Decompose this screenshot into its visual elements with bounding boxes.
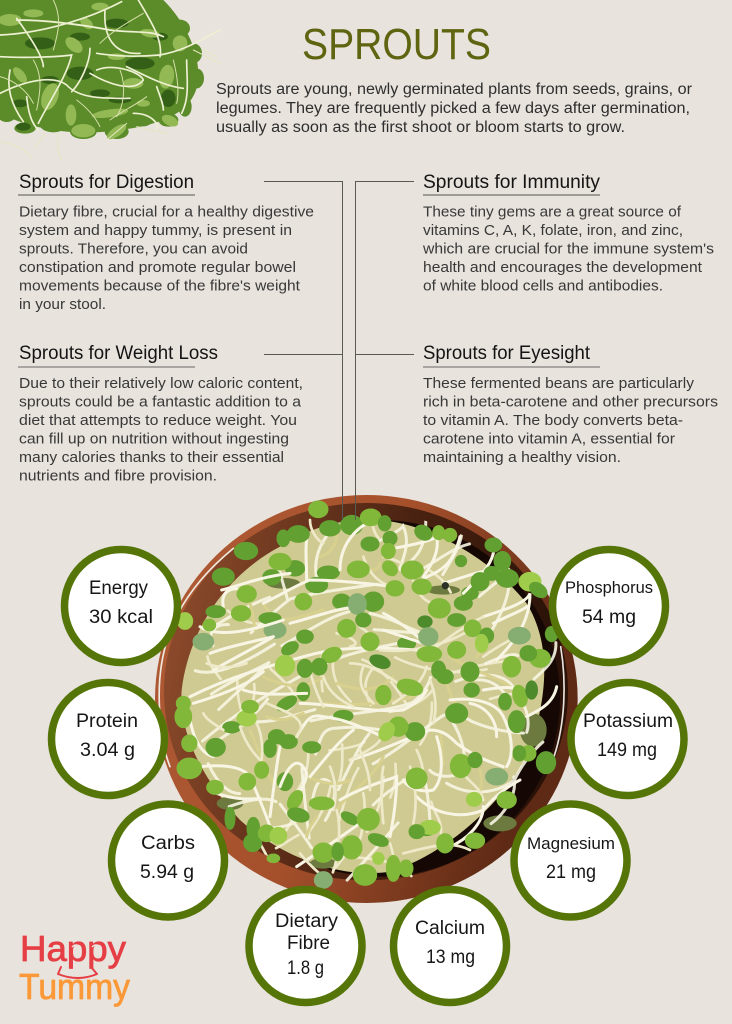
panel: immunity: of white blood cells and antibodies. [423, 278, 663, 294]
panel: eyesight: to vitamin A. The body converts beta- [423, 412, 683, 429]
nutrient: calcium [394, 890, 506, 1002]
panel: digestion: Sprouts for Digestion [19, 171, 194, 193]
panel: eyesight: maintaining a healthy vision. [423, 449, 621, 466]
nutrient: energy: Energy [89, 578, 148, 599]
intro text: Sprouts are young, newly germinated plants from seeds, grains, or [216, 81, 692, 98]
nutrient: phosphorus: Phosphorus [565, 579, 653, 597]
panel: weight loss: diet that attempts to reduce weight. You [19, 412, 297, 429]
nutrient: potassium: Potassium [583, 711, 673, 732]
nutrient: carbs: Carbs [141, 833, 195, 854]
panel: immunity: which are crucial for the immune system's [422, 240, 714, 258]
nutrient: carbs [112, 804, 224, 917]
panel: digestion: Dietary fibre, crucial for a healthy digestive [19, 204, 314, 220]
title: SPROUTS [302, 20, 491, 69]
nutrient: dietary fibre: Fibre [287, 933, 330, 954]
panel: weight loss: many calories thanks to their essential [19, 449, 284, 466]
panel: eyesight [423, 342, 718, 466]
nutrient: magnesium: 21 mg [546, 862, 596, 883]
nutrient: energy [64, 550, 178, 662]
intro text: usually as soon as the first shoot or bloom starts to grow. [216, 119, 625, 136]
nutrient: magnesium [514, 804, 627, 917]
nutrient: protein: Protein [76, 711, 138, 732]
panel: immunity: health and encourages the development [423, 259, 703, 276]
nutrient: potassium: 149 mg [597, 740, 657, 761]
panel: eyesight: These fermented beans are particularly [423, 375, 695, 392]
nutrient: energy: 30 kcal [89, 607, 153, 628]
panel: weight loss: nutrients and fibre provision. [19, 468, 217, 484]
panel: eyesight: Sprouts for Eyesight [423, 342, 591, 364]
nutrient: dietary fibre [249, 890, 362, 1002]
panel: digestion: in your stool. [19, 296, 106, 313]
nutrient: protein [52, 682, 164, 796]
panel: digestion: system and happy tummy, is present in [19, 222, 292, 239]
nutrient: magnesium: Magnesium [527, 835, 615, 853]
panel: immunity: vitamins C, A, K, folate, iron, and zinc, [423, 222, 683, 239]
nutrient: carbs: 5.94 g [140, 862, 194, 883]
panel: digestion: constipation and promote regular bowel [19, 259, 296, 276]
nutrient: calcium: Calcium [415, 918, 485, 939]
panel: digestion: movements because of the fibre's weight [19, 278, 301, 294]
panel: weight loss: can fill up on nutrition without ingesting [19, 430, 289, 448]
illustration: pile of sprouts top left [0, 0, 220, 160]
nutrient: protein: 3.04 g [80, 740, 135, 761]
logo: Happy Tummy: Tummy [19, 966, 130, 1007]
illustration: bowl of sprouts [155, 495, 578, 903]
intro text [216, 81, 692, 136]
panel: weight loss: Due to their relatively low caloric content, [19, 375, 303, 392]
logo: Happy Tummy [19, 928, 130, 1007]
nutrient: potassium [571, 682, 684, 796]
nutrient: calcium: 13 mg [426, 947, 475, 968]
panel: immunity [422, 171, 714, 294]
panel: weight loss [18, 342, 303, 484]
panel: immunity: Sprouts for Immunity [423, 171, 600, 193]
intro text: legumes. They are frequently picked a few days after germination, [216, 100, 690, 117]
panel: weight loss: Sprouts for Weight Loss [19, 342, 218, 364]
panel: eyesight: carotene into vitamin A, essential for [423, 430, 675, 448]
connector lines [264, 182, 414, 520]
panel: eyesight: rich in beta-carotene and other precursors [423, 394, 718, 410]
nutrient: phosphorus [552, 550, 666, 662]
nutrient: dietary fibre: Dietary [275, 911, 339, 932]
nutrient: phosphorus: 54 mg [582, 607, 636, 628]
nutrient: dietary fibre: 1.8 g [287, 958, 324, 979]
panel: immunity: These tiny gems are a great source of [423, 204, 682, 220]
panel: weight loss: sprouts could be a fantastic addition to a [19, 394, 302, 410]
panel: digestion [18, 171, 314, 313]
panel: digestion: sprouts. Therefore, you can avoid [19, 240, 248, 258]
logo: Happy Tummy: Happy [20, 928, 126, 969]
